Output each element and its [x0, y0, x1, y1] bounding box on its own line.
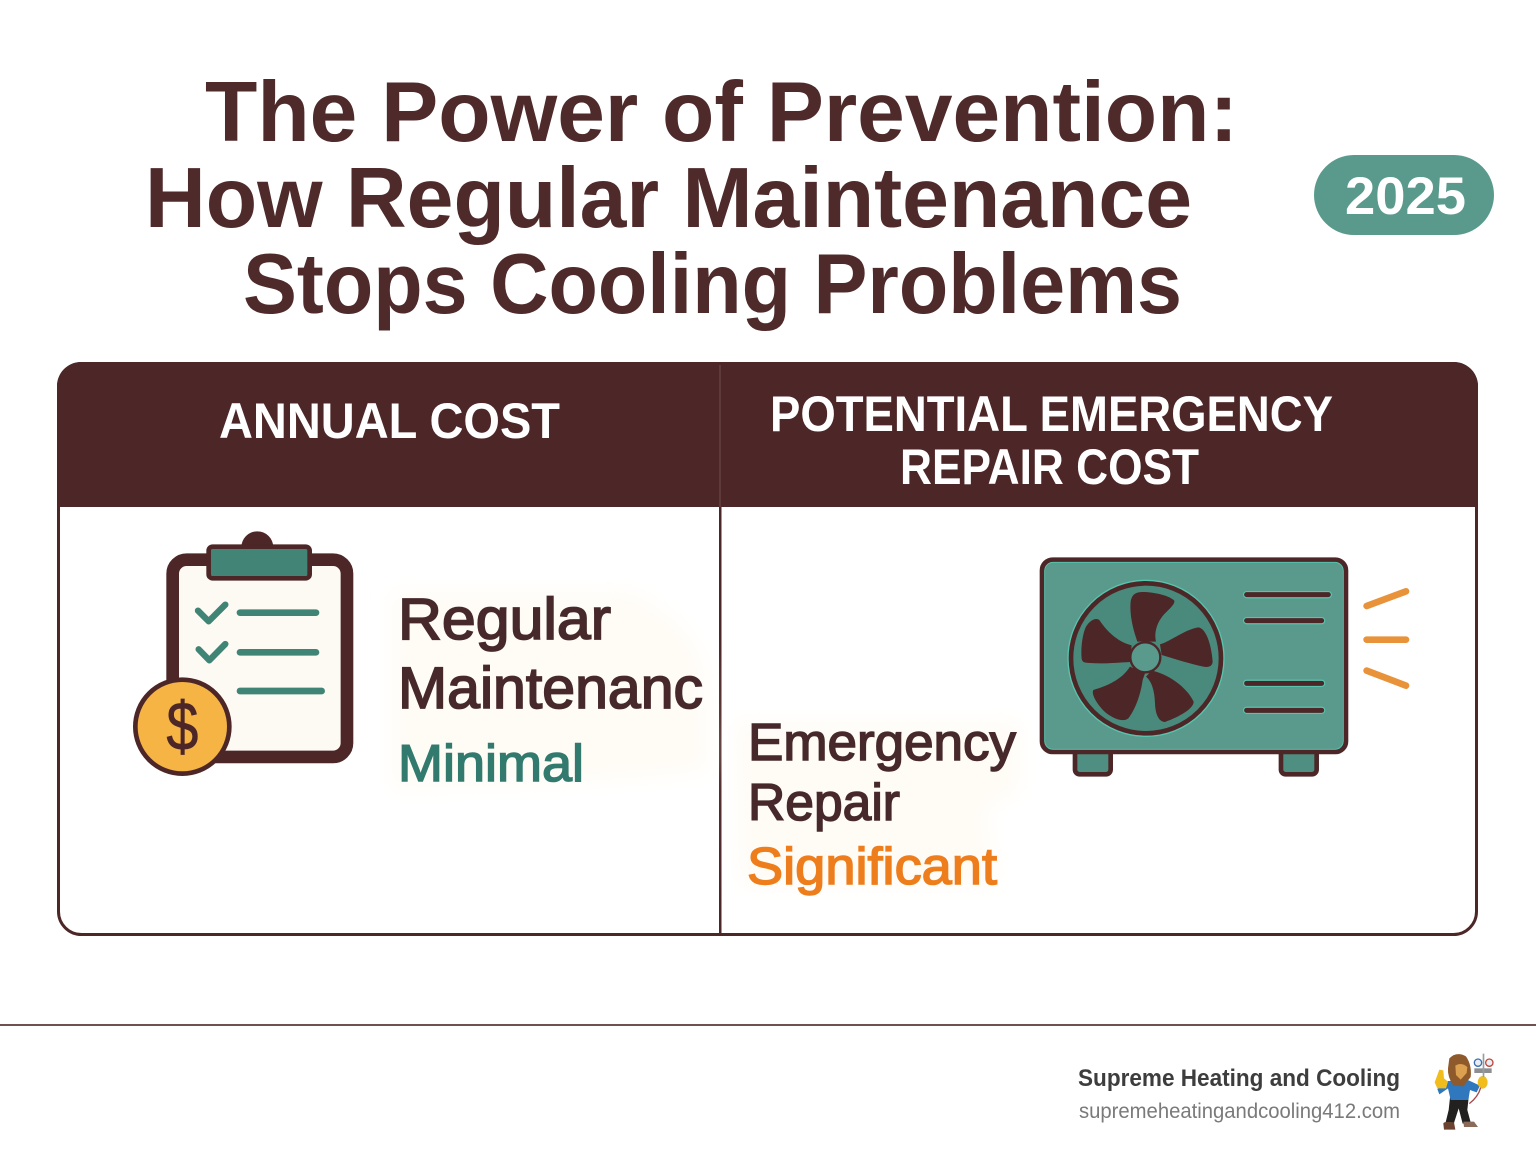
left glove — [1435, 1070, 1448, 1088]
header: potential emergency repair cost: POTENTIAL EMERGENCY — [770, 386, 1333, 442]
title: How Regular Maintenance — [145, 151, 1192, 246]
icon: outdoor AC unit — [1042, 560, 1406, 774]
title: The Power of Prevention: — [205, 65, 1238, 160]
unit body — [1042, 560, 1346, 752]
footer brand text: Supreme Heating and Cooling — [1078, 1065, 1400, 1092]
header: annual cost: ANNUAL COST — [219, 393, 560, 449]
year badge — [1314, 155, 1494, 235]
footer brand text: supremeheatingandcooling412.com — [1079, 1100, 1400, 1123]
motion lines — [1367, 591, 1406, 686]
icon: clipboard with dollar coin — [135, 531, 347, 774]
right glove — [1478, 1076, 1488, 1089]
icon: lion mascot — [1435, 1054, 1493, 1130]
title — [145, 65, 1238, 332]
head and mane — [1448, 1054, 1471, 1086]
label: emergency repair: Emergency — [748, 714, 1016, 772]
label: regular maintenance: Regular — [398, 587, 611, 652]
header: potential emergency repair cost — [773, 396, 1332, 484]
dollar coin — [135, 680, 229, 774]
comparison table — [57, 362, 1478, 935]
clipboard board — [173, 560, 347, 757]
fan — [1068, 581, 1224, 736]
header: potential emergency repair cost: REPAIR COST — [900, 439, 1199, 495]
clipboard clip — [209, 547, 310, 578]
label: regular maintenance: Maintenanc — [398, 656, 703, 721]
text glow: maintenance — [392, 592, 708, 788]
label: regular maintenance: Minimal — [398, 735, 584, 793]
year badge: 2025 — [1345, 167, 1466, 226]
label: emergency repair: Significant — [747, 838, 998, 896]
icon: clipboard with dollar coin: $ — [166, 689, 198, 765]
shoes — [1443, 1122, 1455, 1130]
hose — [1469, 1088, 1481, 1104]
gauges — [1474, 1059, 1482, 1066]
label: emergency repair: Repair — [748, 774, 900, 832]
torso — [1437, 1080, 1480, 1100]
unit feet — [1075, 748, 1317, 774]
footer divider — [0, 1024, 1536, 1026]
table header band — [57, 362, 1478, 507]
clipboard knob — [241, 531, 273, 563]
footer brand text — [1078, 1065, 1400, 1123]
checklist rows — [198, 605, 322, 691]
label: emergency repair — [747, 714, 1016, 896]
title: Stops Cooling Problems — [243, 237, 1182, 332]
vents — [1247, 595, 1328, 710]
legs — [1445, 1098, 1471, 1125]
text glow: repair — [735, 722, 1020, 885]
label: regular maintenance — [398, 587, 703, 793]
